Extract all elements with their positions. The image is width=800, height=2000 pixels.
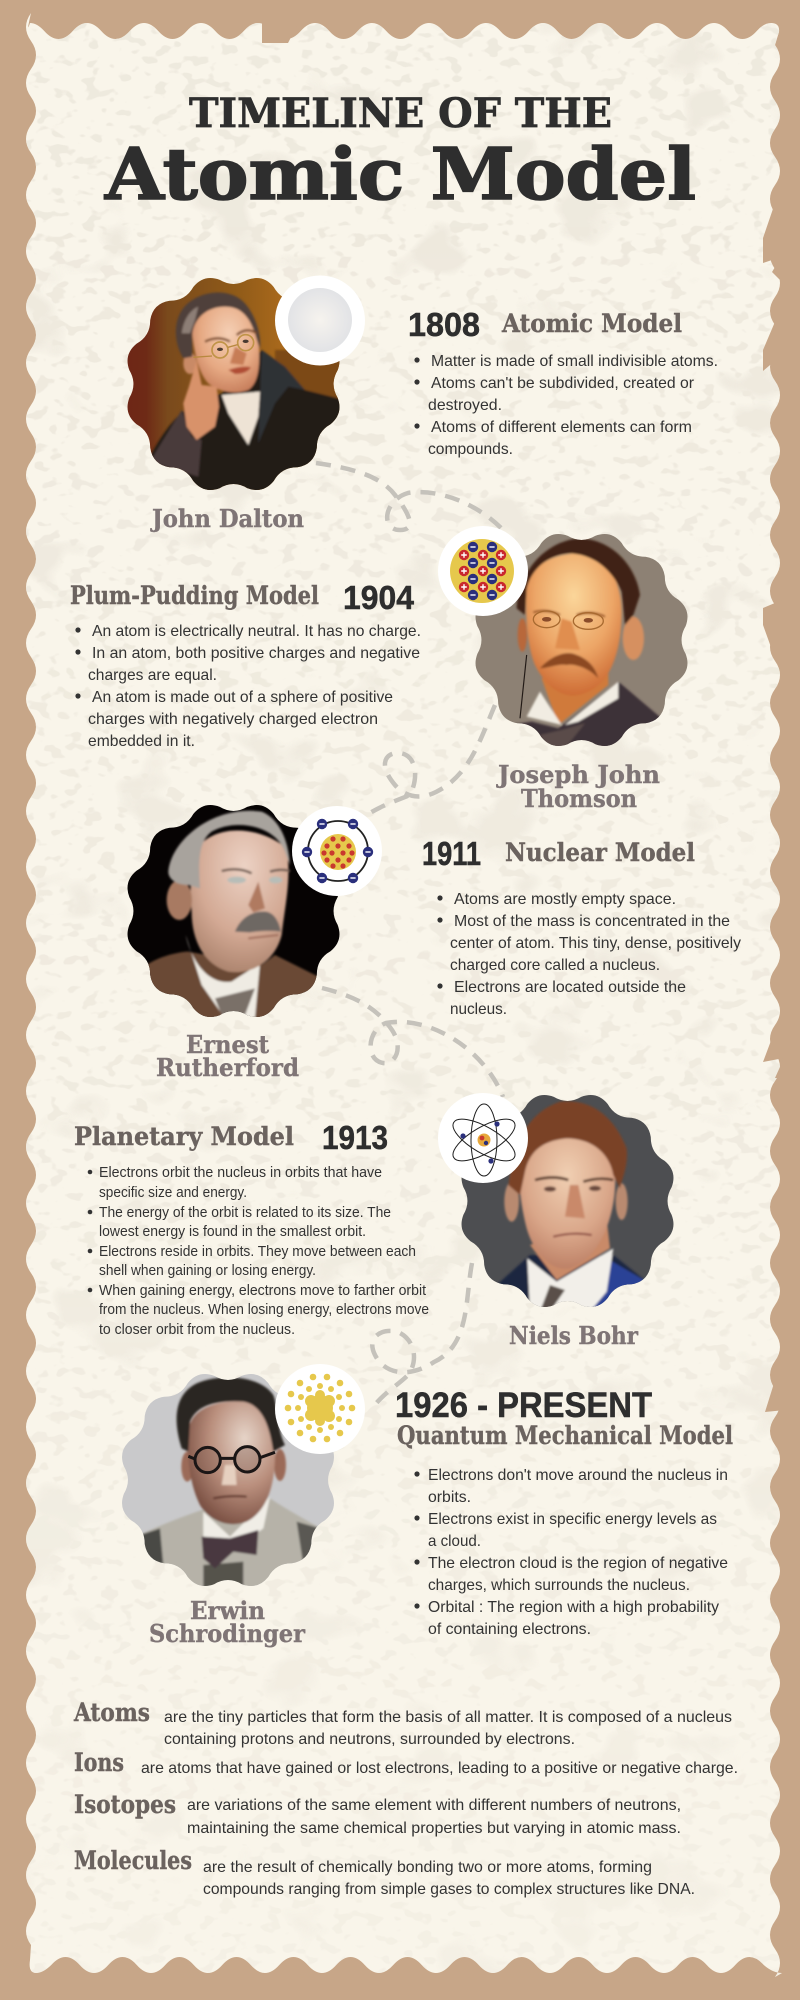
- text block: Rutherford points: charged core called a nucleus.: [450, 957, 660, 974]
- definition: Molecules: are the result of chemically bonding two or more atoms, forming: [203, 1859, 652, 1876]
- text block: Rutherford points: center of atom. This tiny, dense, positively: [450, 935, 741, 952]
- title: [104, 90, 696, 216]
- heading: 1911 Nuclear Model: Nuclear Model: [505, 838, 695, 867]
- text block: Schrodinger points: [414, 1467, 728, 1638]
- heading: Planetary Model 1913: 1913: [322, 1119, 388, 1156]
- dashed connector: Rutherford to Bohr: [322, 988, 503, 1097]
- portrait: John Dalton: [128, 278, 340, 490]
- definition: Ions: Ions: [74, 1748, 124, 1777]
- icon: electron cloud: [275, 1364, 365, 1454]
- text block: Thomson points: [75, 623, 421, 750]
- icon: planetary atom: [438, 1093, 528, 1183]
- heading: Planetary Model 1913: [74, 1119, 388, 1156]
- text block: Rutherford points: nucleus.: [450, 1001, 507, 1018]
- text block: Dalton points: compounds.: [428, 441, 513, 458]
- text block: Schrodinger points: The electron cloud is the region of negative: [428, 1555, 728, 1572]
- icon: plum pudding model: [438, 526, 528, 616]
- heading: Planetary Model 1913: Planetary Model: [74, 1122, 294, 1151]
- title: TIMELINE OF THE: [189, 90, 612, 137]
- heading: 1911 Nuclear Model: 1911: [422, 835, 481, 872]
- text block: Schrodinger points: Electrons exist in specific energy levels as: [428, 1511, 717, 1528]
- text block: Dalton points: Atoms of different elements can form: [431, 419, 692, 436]
- portrait: Niels Bohr: [462, 1095, 674, 1307]
- text block: Schrodinger points: Electrons don't move around the nucleus in: [428, 1467, 728, 1484]
- text block: Schrodinger points: Orbital : The region with a high probability: [428, 1599, 719, 1616]
- portrait: Joseph John Thomson: [476, 534, 688, 746]
- definition: Atoms: containing protons and neutrons, surrounded by electrons.: [164, 1731, 575, 1748]
- text block: Rutherford points: Electrons are located outside the: [454, 979, 686, 996]
- text block: Thomson points: charges are equal.: [88, 667, 217, 684]
- portrait: Ernest Rutherford: [128, 805, 340, 1017]
- definition: Atoms: [73, 1698, 732, 1748]
- text block: Rutherford points: [437, 891, 741, 1018]
- text block: Bohr points: [88, 1165, 429, 1338]
- dashed connector: Dalton to Thomson: [316, 463, 505, 532]
- definition: Molecules: compounds ranging from simple gases to complex structures like DNA.: [203, 1881, 695, 1898]
- definition: Isotopes: [74, 1790, 681, 1837]
- definition: Molecules: Molecules: [74, 1846, 192, 1875]
- text block: Rutherford points: Most of the mass is concentrated in the: [454, 913, 730, 930]
- definition: Isotopes: maintaining the same chemical properties but varying in atomic mass.: [187, 1820, 681, 1837]
- heading: 1808 Atomic Model: 1808: [408, 306, 480, 343]
- heading: 1911 Nuclear Model: [422, 835, 695, 872]
- name: Ernest Rutherford: Rutherford: [156, 1053, 299, 1082]
- definition: Atoms: Atoms: [73, 1698, 150, 1727]
- text block: Dalton points: destroyed.: [428, 397, 502, 414]
- heading: 1808 Atomic Model: [408, 306, 682, 343]
- text block: Bohr points: to closer orbit from the nucleus.: [99, 1322, 295, 1338]
- text block: Bohr points: The energy of the orbit is related to its size. The: [99, 1205, 391, 1221]
- name: Joseph John Thomson: [496, 760, 660, 813]
- name: Ernest Rutherford: Ernest: [186, 1030, 269, 1059]
- name: Joseph John Thomson: Joseph John: [496, 760, 660, 789]
- definition: Ions: are atoms that have gained or lost electrons, leading to a positive or negative charge.: [141, 1760, 738, 1777]
- text block: Bohr points: shell when gaining or losing energy.: [99, 1263, 316, 1279]
- heading: Plum-Pudding Model 1904: 1904: [343, 579, 415, 616]
- text block: Schrodinger points: a cloud.: [428, 1533, 481, 1550]
- name: Niels Bohr: Niels Bohr: [509, 1321, 638, 1350]
- text block: Dalton points: Matter is made of small indivisible atoms.: [431, 353, 718, 370]
- heading: 1926 - Present: 1926 - PRESENT: [395, 1386, 652, 1425]
- text block: Thomson points: charges with negatively charged electron: [88, 711, 378, 728]
- portrait: Erwin Schrodinger: [122, 1374, 334, 1586]
- text block: Bohr points: When gaining energy, electrons move to farther orbit: [99, 1283, 426, 1299]
- text block: Schrodinger points: of containing electrons.: [428, 1621, 591, 1638]
- icon: nuclear model: [292, 806, 382, 896]
- name: Erwin Schrodinger: Schrodinger: [149, 1619, 305, 1648]
- text block: Thomson points: embedded in it.: [88, 733, 195, 750]
- text block: Thomson points: An atom is electrically neutral. It has no charge.: [92, 623, 421, 640]
- text block: Thomson points: In an atom, both positive charges and negative: [92, 645, 420, 662]
- text block: Rutherford points: Atoms are mostly empty space.: [454, 891, 676, 908]
- name: John Dalton: John Dalton: [150, 504, 304, 533]
- definition: Ions: [74, 1748, 738, 1777]
- heading: 1808 Atomic Model: Atomic Model: [501, 309, 682, 338]
- dashed connector: Thomson to Rutherford: [367, 705, 495, 815]
- text block: Schrodinger points: charges, which surrounds the nucleus.: [428, 1577, 690, 1594]
- text block: Bohr points: specific size and energy.: [99, 1185, 247, 1201]
- text block: Thomson points: An atom is made out of a sphere of positive: [92, 689, 393, 706]
- text block: Dalton points: [414, 353, 718, 458]
- torn paper notches: [262, 15, 790, 1430]
- text block: Dalton points: Atoms can't be subdivided, created or: [431, 375, 695, 392]
- heading: Quantum Mechanical Model: Quantum Mechanical Model: [397, 1421, 733, 1450]
- definition: Isotopes: Isotopes: [74, 1790, 176, 1819]
- icon: Dalton solid sphere: [275, 276, 365, 366]
- name: Erwin Schrodinger: [149, 1596, 305, 1648]
- text block: Bohr points: Electrons orbit the nucleus in orbits that have: [99, 1165, 382, 1181]
- definition: Atoms: are the tiny particles that form the basis of all matter. It is composed of a nucleus: [164, 1709, 732, 1726]
- definition: Molecules: [74, 1846, 695, 1898]
- name: Erwin Schrodinger: Erwin: [190, 1596, 265, 1625]
- text block: Bohr points: Electrons reside in orbits. They move between each: [99, 1244, 416, 1260]
- definition: Isotopes: are variations of the same element with different numbers of neutrons,: [187, 1797, 681, 1814]
- text block: Schrodinger points: orbits.: [428, 1489, 471, 1506]
- text block: Bohr points: from the nucleus. When losing energy, electrons move: [99, 1302, 429, 1318]
- title: Atomic Model: [104, 132, 696, 216]
- name: Ernest Rutherford: [156, 1030, 299, 1082]
- dashed connector: Bohr to Schrodinger: [372, 1263, 472, 1407]
- text block: Bohr points: lowest energy is found in the smallest orbit.: [99, 1224, 366, 1240]
- heading: Plum-Pudding Model 1904: [70, 579, 415, 616]
- heading: Plum-Pudding Model 1904: Plum-Pudding Model: [70, 581, 319, 610]
- name: Joseph John Thomson: Thomson: [521, 784, 637, 813]
